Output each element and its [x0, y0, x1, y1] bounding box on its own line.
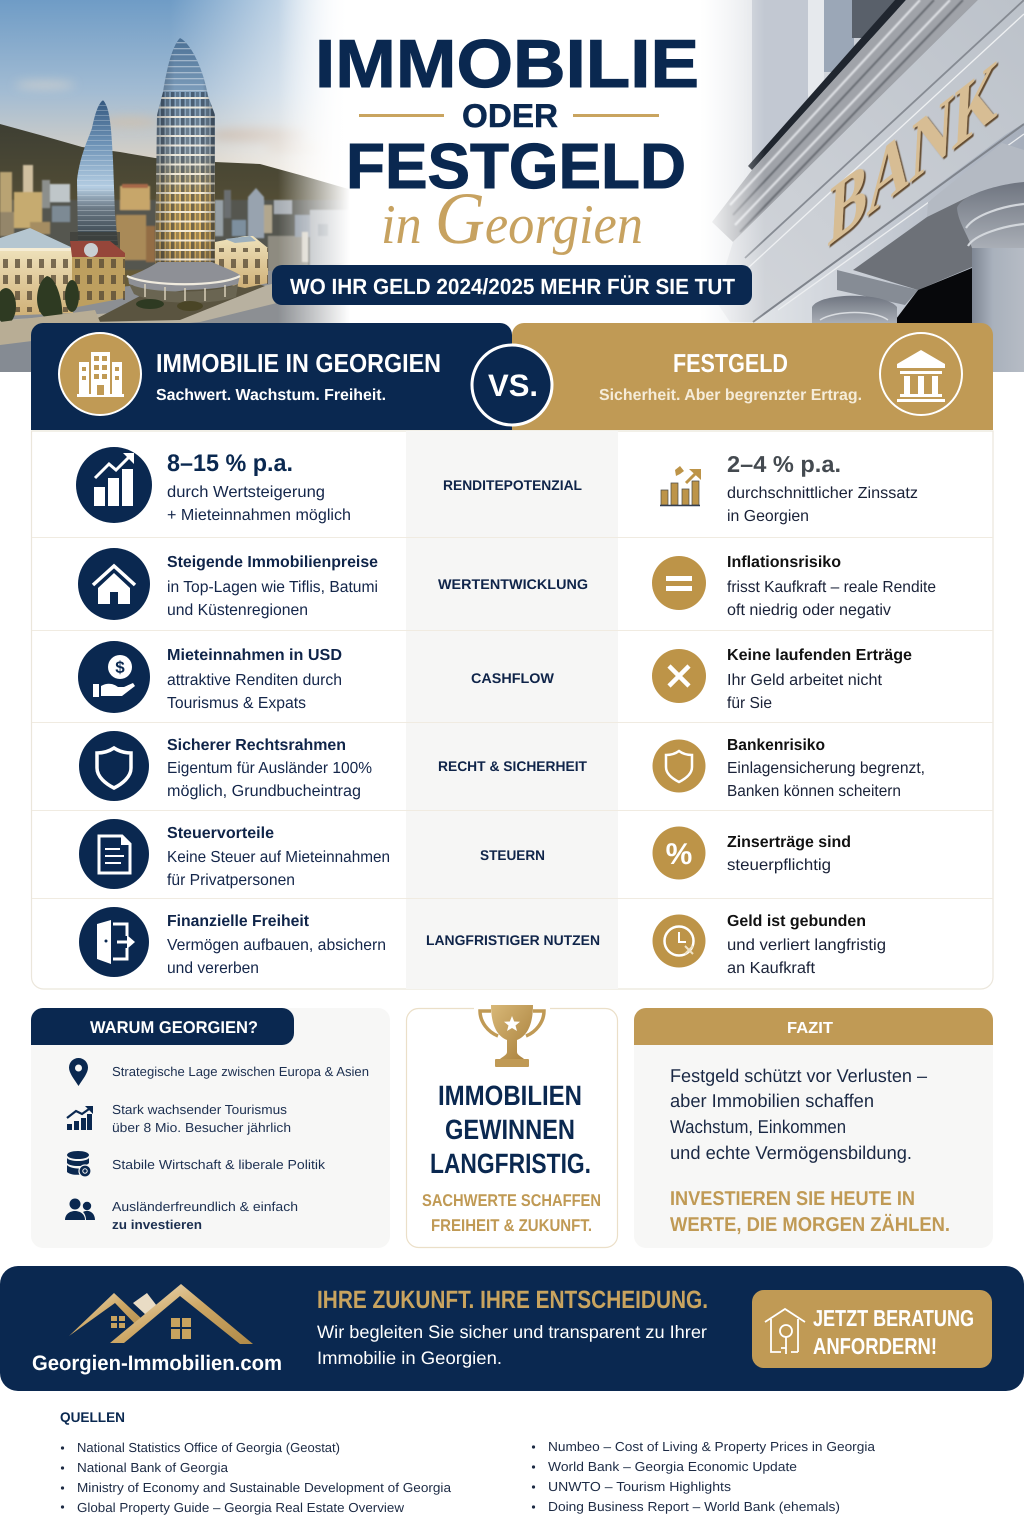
text: begleitung [317, 1322, 707, 1368]
row: langfristiger nutzen [79, 907, 886, 977]
text: begleitung: Wir begleiten Sie sicher und transparent zu Ihrer [317, 1322, 707, 1342]
ground plaza [12, 270, 345, 323]
text: festgeld rendite: durchschnittlicher Zinssatz [727, 485, 918, 502]
icon: trophy [480, 1005, 544, 1067]
heading: immobilien gewinnen langfristig: GEWINNEN [445, 1114, 575, 1145]
text: steuervorteile [167, 825, 390, 889]
text: keine ertraege: für Sie [727, 695, 772, 712]
text: festgeld rendite: 2–4 % p.a. [727, 451, 841, 477]
panel: warum georgien [31, 1008, 390, 1248]
icon: bank [880, 333, 962, 415]
button: beratung [752, 1290, 992, 1368]
call to invest [670, 1188, 950, 1236]
label: steuern: STEUERN [480, 847, 545, 863]
script subtitle: in Georgien [381, 178, 643, 260]
text: tourismus: Stark wachsender Tourismus [112, 1102, 288, 1117]
footer banner [0, 1266, 1024, 1391]
text: bankenrisiko: Bankenrisiko [727, 737, 825, 754]
title line 1: IMMOBILIE [315, 26, 699, 102]
text: finanzielle freiheit [167, 913, 386, 977]
row: renditepotenzial [76, 447, 918, 525]
hero background photo area [0, 0, 1024, 372]
text: zinsertraege: steuerpflichtig [727, 857, 831, 874]
text: geld gebunden: an Kaufkraft [727, 960, 816, 977]
text: immobilie rendite [167, 450, 351, 524]
text: festgeld rendite: in Georgien [727, 508, 809, 525]
text: festgeld rendite [727, 451, 918, 525]
text: geld gebunden: Geld ist gebunden [727, 913, 866, 930]
text: immobilie rendite: + Mieteinnahmen möglich [167, 507, 351, 524]
text: fazit body: aber Immobilien schaffen [670, 1090, 874, 1111]
label: langfristiger nutzen: LANGFRISTIGER NUTZEN [426, 932, 600, 948]
comparison table [32, 431, 993, 989]
tagline: sachwerte: SACHWERTE SCHAFFEN [422, 1191, 601, 1210]
sources left: National Bank of Georgia [77, 1460, 229, 1475]
divider: oder [359, 97, 659, 134]
tagline left: Sachwert. Wachstum. Freiheit. [156, 387, 386, 404]
text: immobilie rendite: durch Wertsteigerung [167, 484, 325, 501]
text: fazit body [670, 1065, 928, 1163]
button text [813, 1305, 974, 1359]
white fade left [281, 0, 350, 323]
icon: location pin [69, 1058, 88, 1086]
text: fazit body: Wachstum, Einkommen [670, 1116, 846, 1137]
tagline right: Sicherheit. Aber begrenzter Ertrag. [599, 387, 862, 404]
text: begleitung: Immobilie in Georgien. [317, 1348, 502, 1368]
icon: percent [652, 826, 706, 880]
sources left: Global Property Guide – Georgia Real Estate Overview [77, 1500, 405, 1515]
button text: ANFORDERN! [813, 1333, 937, 1359]
sources [60, 1409, 876, 1515]
text: mieteinnahmen: attraktive Renditen durch [167, 672, 342, 689]
text: keine ertraege: Keine laufenden Erträge [727, 647, 912, 664]
text: inflationsrisiko: frisst Kaufkraft – reale Rendite [727, 579, 936, 596]
heading: fazit: FAZIT [787, 1020, 833, 1037]
bank building illustration [700, 0, 1024, 372]
vs badge: VS. [488, 368, 538, 403]
riverside right building [215, 236, 268, 288]
icon: apartment building [59, 333, 141, 415]
icon: door exit [79, 907, 149, 977]
text: rechtsrahmen: möglich, Grundbucheintrag [167, 783, 361, 800]
text: inflationsrisiko [727, 554, 936, 619]
text: geld gebunden: und verliert langfristig [727, 937, 886, 954]
icon: gold bars [660, 466, 701, 506]
text: fazit body: und echte Vermögensbildung. [670, 1142, 912, 1163]
call to invest: INVESTIEREN SIE HEUTE IN [670, 1188, 915, 1210]
text: finanzielle freiheit: Finanzielle Freiheit [167, 913, 310, 930]
sources left [61, 1440, 452, 1515]
text: tourismus [112, 1102, 291, 1135]
text: auslaenderfreundlich [112, 1199, 298, 1232]
title line 2: FESTGELD [346, 130, 686, 202]
tagline: sachwerte: FREIHEIT & ZUKUNFT. [431, 1216, 592, 1235]
historic building left [0, 228, 125, 316]
heading: fazit [634, 1008, 993, 1045]
heading right: FESTGELD [673, 348, 788, 378]
text: auslaenderfreundlich: Ausländerfreundlich & einfach [112, 1199, 298, 1214]
row: recht und sicherheit [79, 731, 925, 801]
text: fazit body: Festgeld schützt vor Verlusten – [670, 1065, 928, 1086]
second glass tower [70, 100, 120, 250]
label: wertentwicklung: WERTENTWICKLUNG [438, 576, 588, 592]
text: tourismus: über 8 Mio. Besucher jährlich [112, 1120, 291, 1135]
heading: quellen: QUELLEN [60, 1409, 125, 1425]
logo text: Georgien-Immobilien.com [32, 1352, 282, 1375]
row: cashflow [78, 641, 912, 713]
text: wirtschaft: Stabile Wirtschaft & liberale Politik [112, 1157, 326, 1172]
heading: immobilien gewinnen langfristig [430, 1080, 591, 1179]
subtitle pill [272, 265, 752, 305]
icon: coin stack [67, 1151, 91, 1177]
text: keine ertraege: Ihr Geld arbeitet nicht [727, 672, 883, 689]
text: steigende preise: Steigende Immobilienpreise [167, 554, 378, 571]
sources right: World Bank – Georgia Economic Update [548, 1459, 797, 1474]
text: lage: Strategische Lage zwischen Europa & Asien [112, 1064, 369, 1079]
white fade right [700, 0, 762, 323]
sources right: UNWTO – Tourism Highlights [548, 1479, 732, 1494]
text: steuervorteile: Keine Steuer auf Mieteinnahmen [167, 849, 390, 866]
heading: immobilien gewinnen langfristig: IMMOBILIEN [438, 1080, 582, 1111]
sources left: Ministry of Economy and Sustainable Development of Georgia [77, 1480, 452, 1495]
text: mieteinnahmen [167, 647, 342, 712]
icon: gold shield [652, 740, 706, 792]
heading: immobilien gewinnen langfristig: LANGFRISTIG. [430, 1148, 591, 1179]
tagline: sachwerte [422, 1191, 601, 1235]
icon: money hand [78, 641, 150, 713]
sources right: Numbeo – Cost of Living & Property Prices in Georgia [548, 1439, 876, 1454]
text: finanzielle freiheit: und vererben [167, 960, 259, 977]
building lettering BANK: BANK [826, 37, 1001, 266]
icon: equals [652, 556, 706, 610]
text: zinsertraege [727, 834, 851, 874]
text: inflationsrisiko: oft niedrig oder negativ [727, 602, 891, 619]
row: wertentwicklung [78, 548, 936, 620]
text: steigende preise: in Top-Lagen wie Tiflis, Batumi [167, 579, 378, 596]
text: steuervorteile: für Privatpersonen [167, 872, 295, 889]
heading: warum georgien [31, 1008, 294, 1045]
text: geld gebunden [727, 913, 886, 977]
label: recht und sicherheit: RECHT & SICHERHEIT [438, 758, 587, 774]
subtitle pill: WO IHR GELD 2024/2025 MEHR FÜR SIE TUT [290, 274, 736, 299]
icon: house [78, 548, 150, 620]
vs badge [472, 345, 552, 425]
sources left: National Statistics Office of Georgia (Geostat) [77, 1440, 340, 1455]
text: immobilie rendite: 8–15 % p.a. [167, 450, 293, 477]
panel: immobilien gewinnen [406, 1004, 618, 1248]
text: rechtsrahmen: Eigentum für Ausländer 100% [167, 760, 372, 777]
call to invest: WERTE, DIE MORGEN ZÄHLEN. [670, 1213, 950, 1236]
divider: oder: ODER [462, 97, 558, 134]
text: rechtsrahmen [167, 737, 372, 800]
text: mieteinnahmen: Tourismus & Expats [167, 695, 306, 712]
heading: warum georgien: WARUM GEORGIEN? [90, 1018, 258, 1037]
comparison header: Festgeld [512, 323, 993, 430]
label: renditepotenzial: RENDITEPOTENZIAL [443, 477, 582, 493]
text: keine ertraege [727, 647, 912, 712]
text: steigende preise: und Küstenregionen [167, 602, 308, 619]
icon: clock [652, 914, 706, 968]
main tower [127, 30, 240, 303]
text: finanzielle freiheit: Vermögen aufbauen, absichern [167, 937, 386, 954]
text: bankenrisiko: Banken können scheitern [727, 783, 901, 800]
label: cashflow: CASHFLOW [471, 670, 555, 686]
icon: growth chart [76, 447, 152, 523]
text: inflationsrisiko: Inflationsrisiko [727, 554, 841, 571]
comparison header: Immobilie [31, 323, 512, 430]
icon: document [79, 819, 149, 889]
text: rechtsrahmen: Sicherer Rechtsrahmen [167, 737, 346, 754]
button text: JETZT BERATUNG [813, 1305, 974, 1331]
icon: percent: % [666, 838, 692, 871]
city skyline illustration [0, 0, 347, 372]
text: steigende preise [167, 554, 378, 619]
text: mieteinnahmen: Mieteinnahmen in USD [167, 647, 342, 664]
text: bankenrisiko: Einlagensicherung begrenzt, [727, 760, 925, 777]
sources right: Doing Business Report – World Bank (ehemals) [548, 1499, 840, 1514]
text: auslaenderfreundlich: zu investieren [112, 1217, 202, 1232]
sources right [532, 1439, 876, 1514]
heading: zukunft: IHRE ZUKUNFT. IHRE ENTSCHEIDUNG. [317, 1286, 708, 1314]
icon: cross [652, 649, 706, 703]
panel: fazit [634, 1008, 993, 1248]
text: zinsertraege: Zinserträge sind [727, 834, 851, 851]
title [315, 26, 699, 260]
icon: shield [79, 731, 149, 801]
logo: houses [69, 1284, 253, 1344]
icon: money hand: $ [115, 658, 125, 677]
icon: house key [765, 1309, 805, 1354]
trees [0, 276, 203, 324]
icon: people [65, 1198, 95, 1220]
icon: tourism chart [67, 1106, 93, 1130]
text: steuervorteile: Steuervorteile [167, 825, 274, 842]
heading left: IMMOBILIE IN GEORGIEN [156, 348, 441, 378]
row: steuern [79, 819, 851, 889]
text: bankenrisiko [727, 737, 925, 800]
background city [0, 164, 345, 271]
